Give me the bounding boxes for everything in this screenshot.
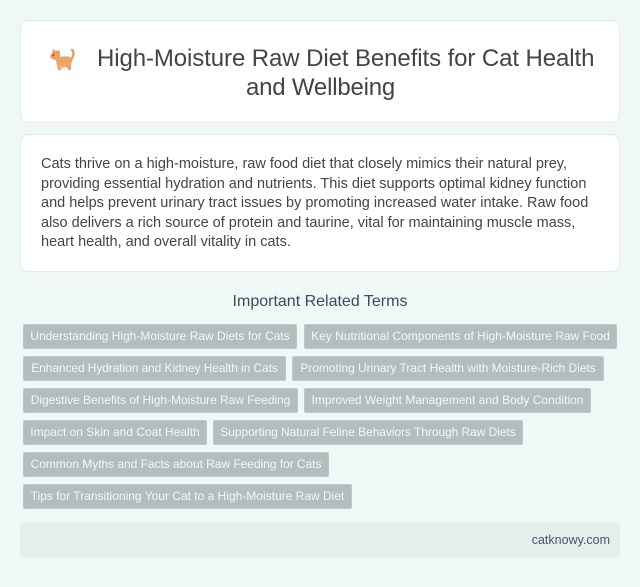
heading: related terms: Important Related Terms xyxy=(233,293,407,310)
text block: heart health, and overall vitality in cats. xyxy=(41,234,291,250)
tag: Common Myths and Facts about Raw Feeding for Cats xyxy=(31,457,321,471)
panel: title card xyxy=(20,20,620,123)
tag xyxy=(23,452,329,477)
heading xyxy=(97,45,594,101)
footer xyxy=(20,523,620,557)
tag xyxy=(23,388,298,413)
icon: cat xyxy=(50,48,75,70)
panel: description xyxy=(20,134,620,272)
tag xyxy=(23,356,286,381)
tag: Understanding High-Moisture Raw Diets for Cats xyxy=(30,329,290,343)
tag: Key Nutritional Components of High-Moisture Raw Food xyxy=(311,329,610,343)
text block: also delivers a rich source of protein and taurine, vital for maintaining muscle mass, xyxy=(41,215,575,231)
tag: Digestive Benefits of High-Moisture Raw Feeding xyxy=(31,393,290,407)
tag xyxy=(23,324,297,349)
footer credit: catknowy.com xyxy=(532,533,610,547)
tag xyxy=(304,324,617,349)
heading: High-Moisture Raw Diet Benefits for Cat Health xyxy=(97,45,594,72)
text block: Cats thrive on a high-moisture, raw food diet that closely mimics their natural prey, xyxy=(41,156,567,172)
tag xyxy=(304,388,591,413)
text block: and helps prevent urinary tract issues by promoting increased water intake. Raw food xyxy=(41,195,588,211)
tag: Supporting Natural Feline Behaviors Through Raw Diets xyxy=(220,425,516,439)
tag list xyxy=(23,324,617,509)
tag xyxy=(213,420,523,445)
text block xyxy=(41,156,588,250)
tag: Tips for Transitioning Your Cat to a High-Moisture Raw Diet xyxy=(31,489,344,503)
tag xyxy=(292,356,604,381)
tag: Enhanced Hydration and Kidney Health in Cats xyxy=(31,361,278,375)
tag: Promoting Urinary Tract Health with Moisture-Rich Diets xyxy=(300,361,596,375)
tag: Improved Weight Management and Body Condition xyxy=(312,393,583,407)
text block: providing essential hydration and nutrients. This diet supports optimal kidney function xyxy=(41,176,586,192)
heading: and Wellbeing xyxy=(246,74,395,101)
tag xyxy=(23,484,352,509)
tag: Impact on Skin and Coat Health xyxy=(30,425,200,439)
tag xyxy=(23,420,207,445)
